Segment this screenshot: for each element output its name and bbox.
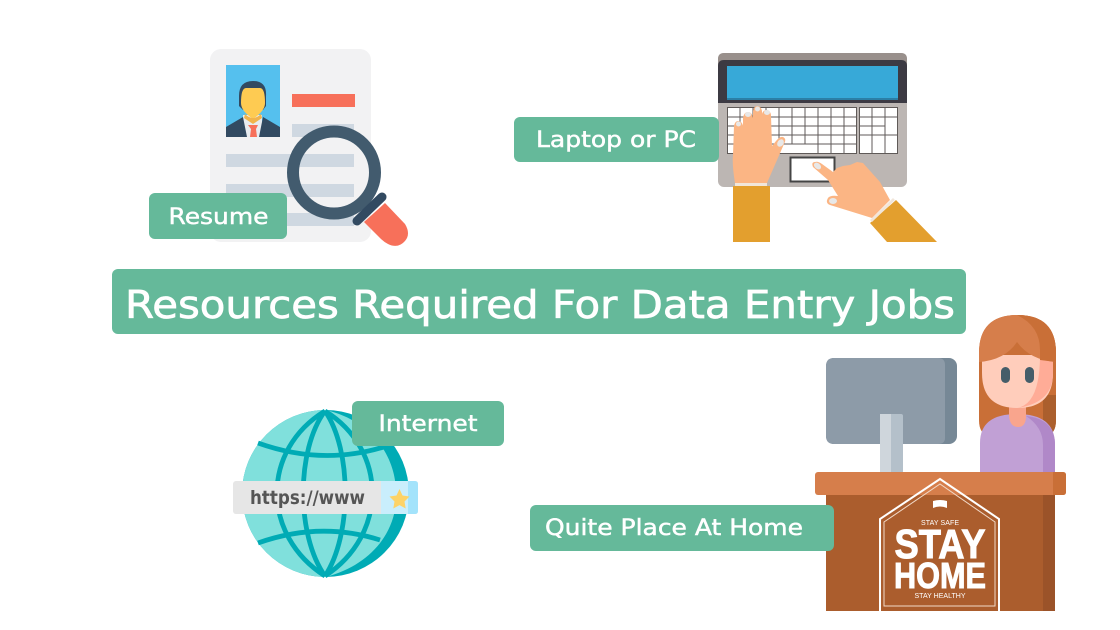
label: internet <box>352 401 504 446</box>
stay home sign: STAY <box>894 521 986 567</box>
resume text lines <box>226 124 354 226</box>
stay home sign: STAY SAFE <box>921 520 959 527</box>
label: laptop or PC <box>514 117 719 162</box>
label: quiet place at home <box>530 505 834 551</box>
laptop body <box>718 53 907 187</box>
panel: home desk illustration <box>815 315 1066 611</box>
browser address bar <box>233 481 418 514</box>
laptop screen <box>718 60 907 103</box>
icon: globe <box>242 410 409 577</box>
title banner <box>112 269 966 334</box>
laptop keyboard <box>727 107 898 154</box>
icon: star <box>390 489 410 508</box>
resume document sheet <box>210 49 371 242</box>
woman figure <box>979 315 1056 473</box>
right hand and sleeve <box>812 161 937 242</box>
label: quiet place at home: Quite Place At Home <box>545 516 803 541</box>
icon: profile photo <box>226 65 280 137</box>
desk <box>815 472 1066 611</box>
stay home sign: STAY HEALTHY <box>914 593 966 600</box>
stay home sign: HOME <box>894 555 986 596</box>
stay home sign <box>880 479 999 611</box>
panel: laptop illustration <box>718 53 937 242</box>
monitor <box>826 358 957 473</box>
icon: magnifying glass <box>293 132 408 246</box>
resume red heading bar <box>292 94 355 107</box>
panel: resume illustration <box>210 49 408 246</box>
laptop trackpad <box>790 158 834 182</box>
browser address bar: https://www <box>250 487 365 509</box>
left hand and sleeve <box>733 106 785 242</box>
panel: internet illustration <box>233 410 418 577</box>
title banner: Resources Required For Data Entry Jobs <box>125 283 955 327</box>
label: resume <box>149 193 287 239</box>
label: internet: Internet <box>378 412 478 437</box>
label: resume: Resume <box>168 205 268 230</box>
label: laptop or PC: Laptop or PC <box>536 128 696 153</box>
